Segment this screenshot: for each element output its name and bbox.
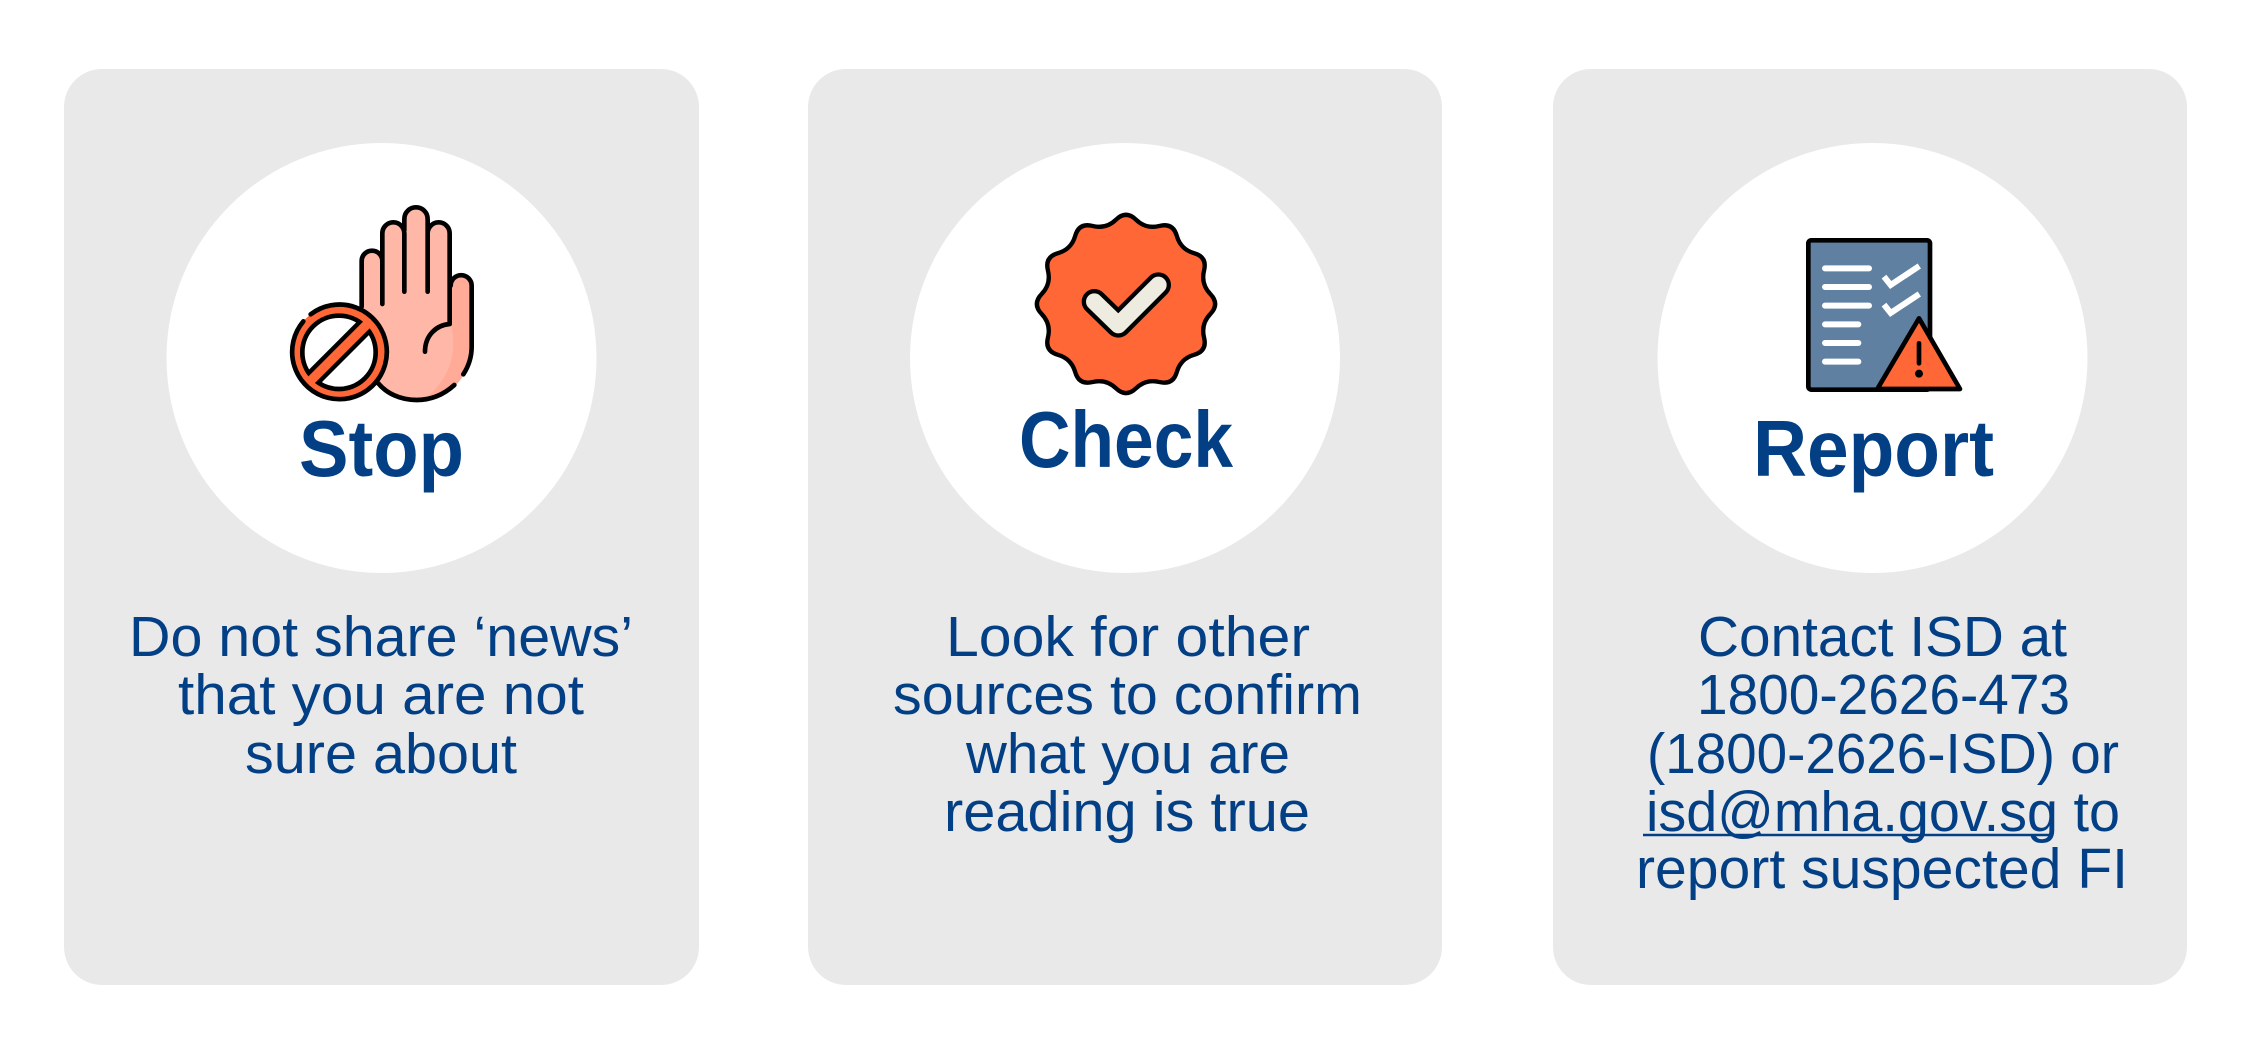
text: report description: (1800-2626-ISD) or <box>1647 722 2119 786</box>
text: report description: Contact ISD at <box>1698 605 2067 669</box>
heading: Stop: Stop <box>299 404 464 493</box>
text: stop description: sure about <box>245 722 517 786</box>
text: report description: isd@mha.gov.sg to <box>1646 780 2120 844</box>
text: check description <box>893 605 1362 844</box>
text: report description: 1800-2626-473 <box>1697 663 2070 727</box>
text: stop description: Do not share ‘news’ <box>129 605 633 669</box>
icon: scalloped badge with check mark <box>1037 215 1215 393</box>
text: check description: sources to confirm <box>893 663 1362 727</box>
panel: report <box>1553 69 2187 985</box>
text: check description: what you are <box>965 722 1290 786</box>
heading: Check: Check <box>1019 395 1233 484</box>
text: stop description <box>129 605 633 786</box>
icon: raised hand with prohibition sign <box>292 207 472 400</box>
heading: Report: Report <box>1753 404 1994 493</box>
panel: stop <box>64 69 699 985</box>
text: report description: report suspected FI <box>1636 837 2128 901</box>
panel: check <box>808 69 1442 985</box>
icon: checklist document with warning triangle <box>1808 240 1960 390</box>
text: check description: Look for other <box>946 605 1310 669</box>
text: stop description: that you are not <box>178 663 584 727</box>
text: report description <box>1636 605 2128 901</box>
text: check description: reading is true <box>944 780 1310 844</box>
